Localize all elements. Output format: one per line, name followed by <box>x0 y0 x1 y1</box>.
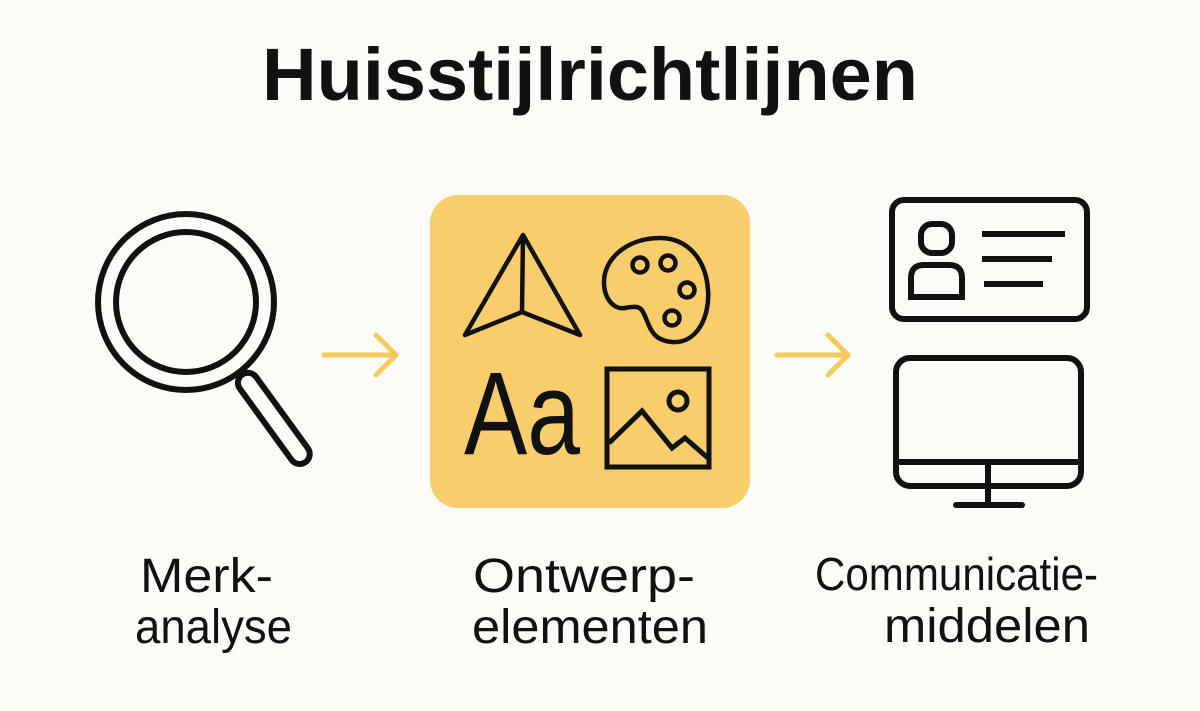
icon: monitor <box>896 358 1081 505</box>
label: Merk-analyse: analyse <box>135 601 292 654</box>
label: Ontwerp-elementen: elementen <box>472 601 708 654</box>
icon: palette <box>604 238 708 342</box>
icon: image <box>607 369 709 467</box>
label: Communicatie-middelen: middelen <box>884 600 1090 653</box>
label: Merk-analyse <box>135 550 292 654</box>
icon: typography Aa: Aa <box>464 348 580 480</box>
panel: design elements <box>430 195 750 508</box>
label: Communicatie-middelen <box>815 548 1098 653</box>
arrow 2 <box>777 335 848 375</box>
arrow 1 <box>324 335 396 375</box>
label: Ontwerp-elementen <box>472 550 708 654</box>
label: Ontwerp-elementen: Ontwerp- <box>473 550 695 603</box>
icon: triangle <box>465 235 580 335</box>
title: Huisstijlrichtlijnen <box>262 33 918 116</box>
icon: ID card <box>892 200 1087 319</box>
icon: magnifying glass <box>98 214 314 468</box>
label: Merk-analyse: Merk- <box>140 550 273 603</box>
label: Communicatie-middelen: Communicatie- <box>815 548 1098 600</box>
